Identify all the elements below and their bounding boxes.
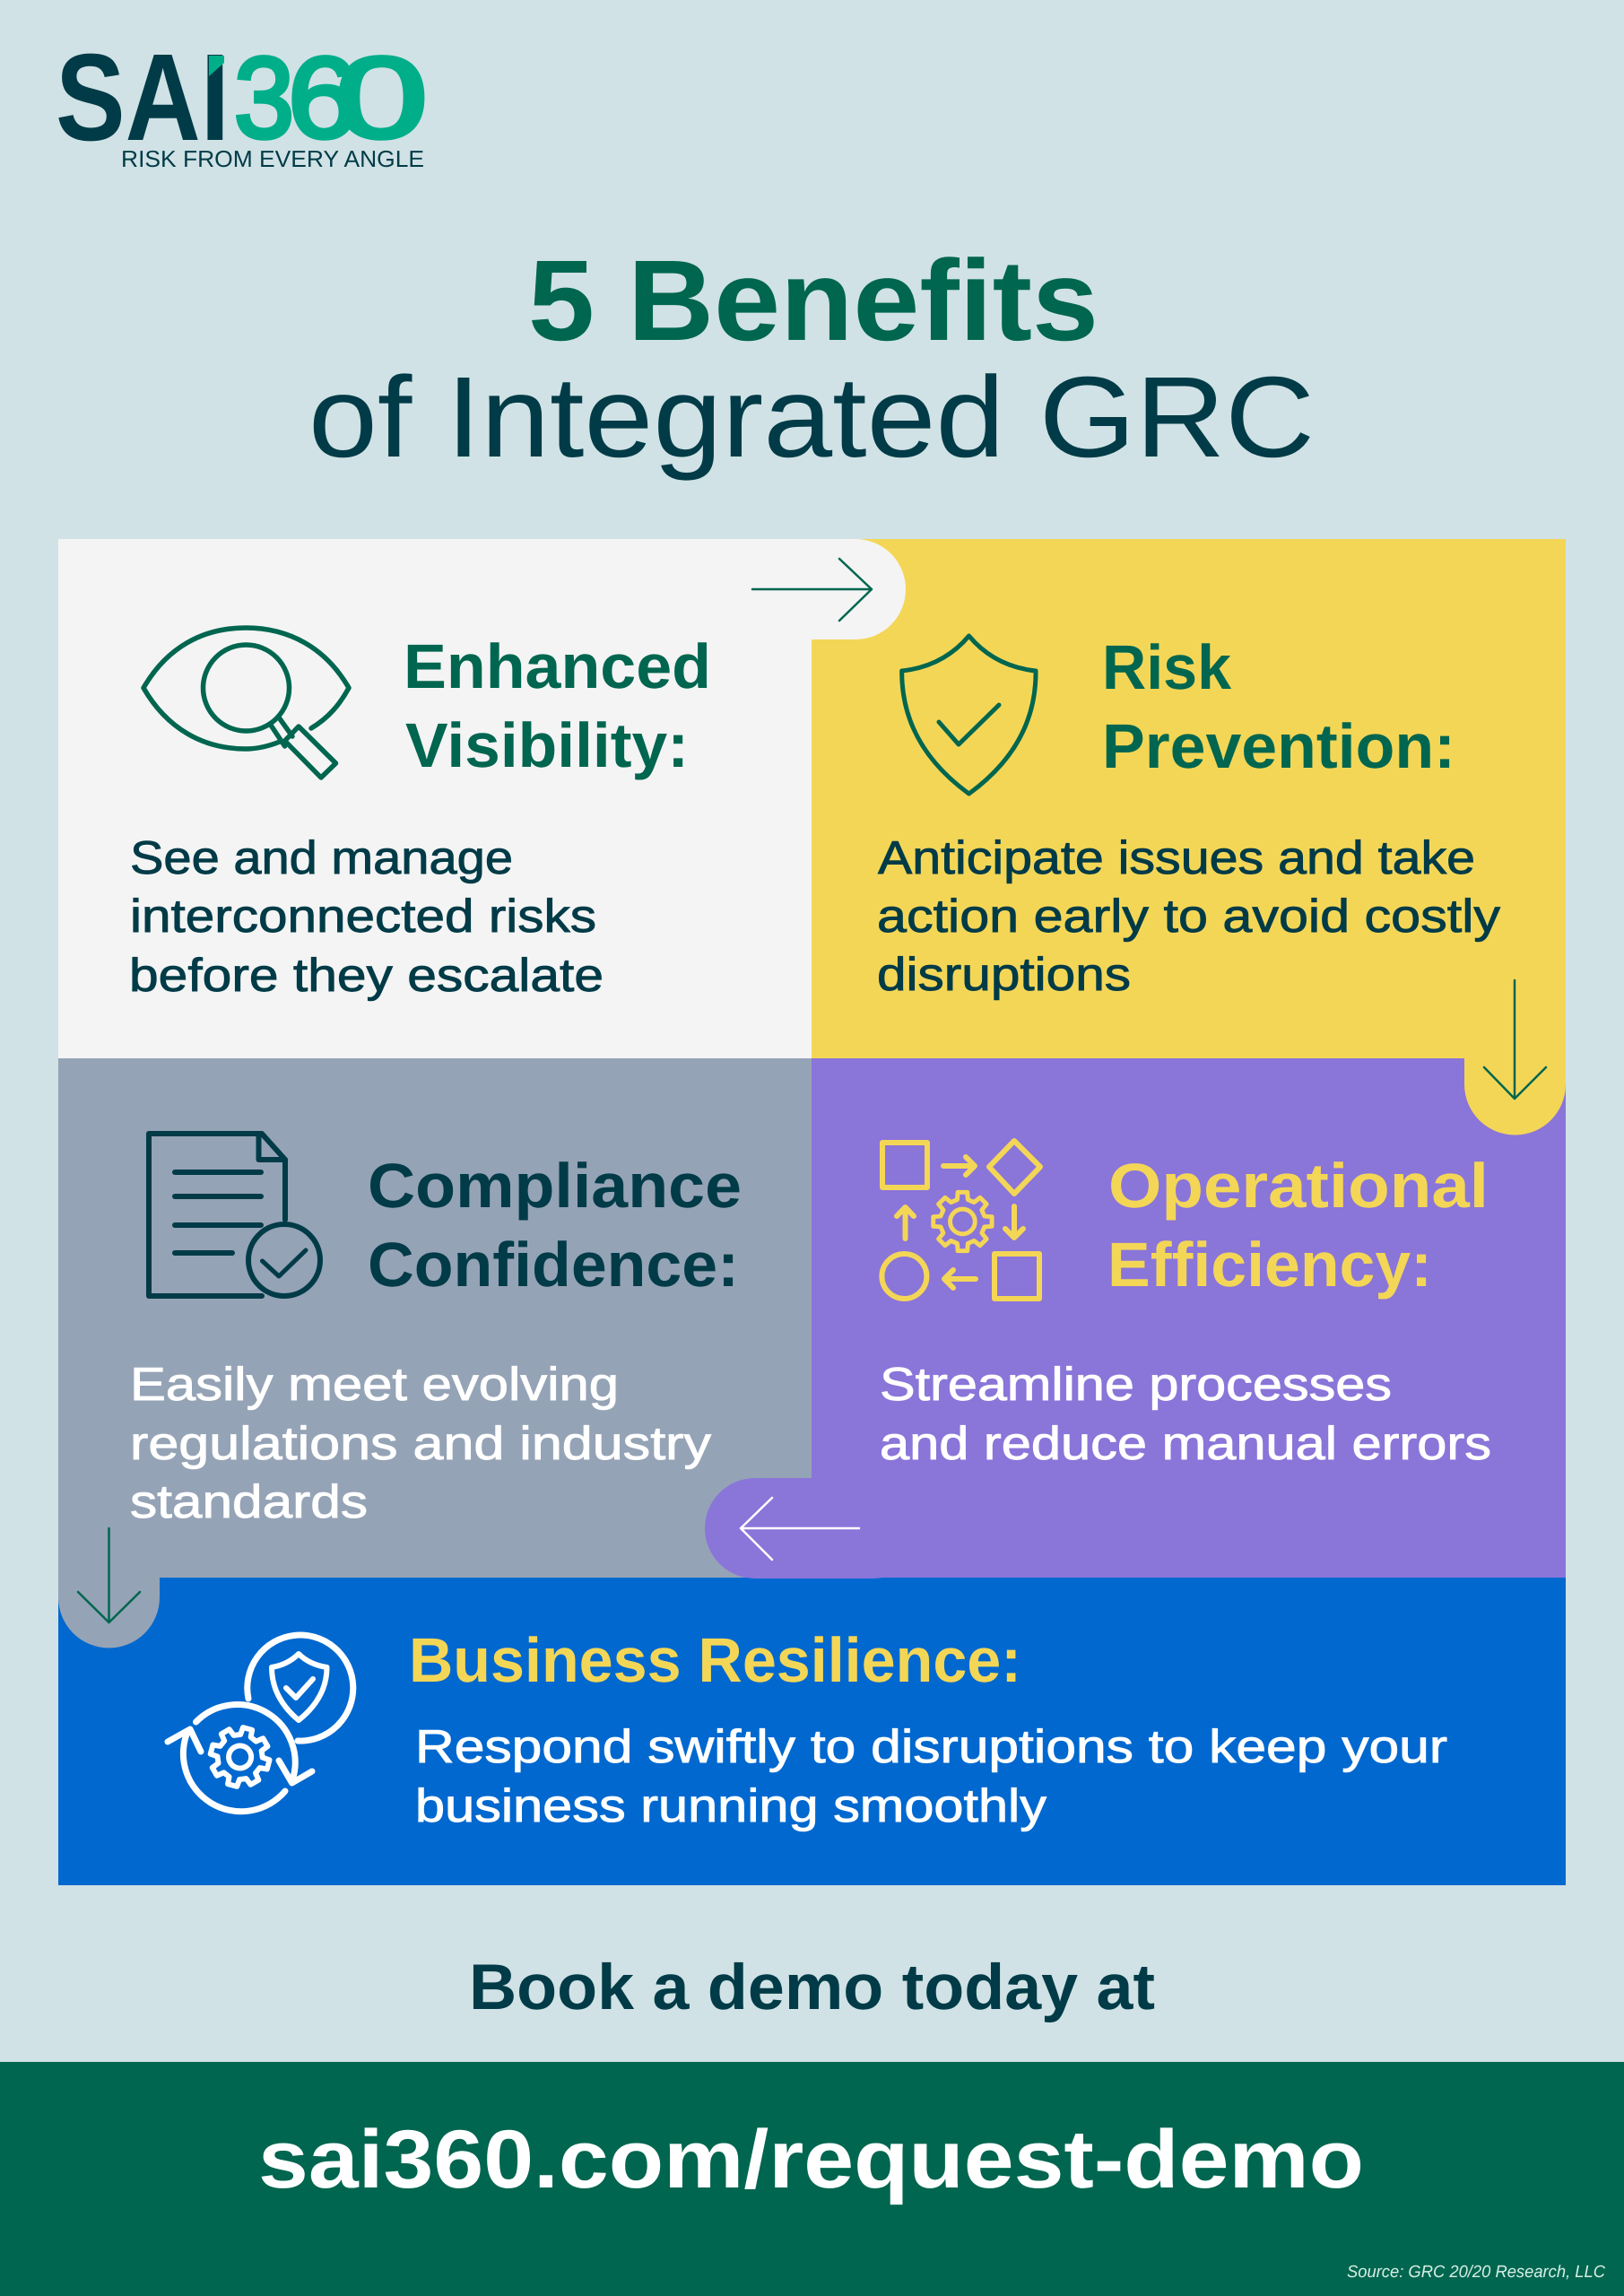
heading: Business Resilience: Business Resilience: — [409, 1625, 1021, 1695]
text: compliance description: Easily meet evolving — [130, 1359, 619, 1411]
arrow: left to compliance — [741, 1498, 859, 1560]
text: business resilience description: Respond swiftly to disruptions to keep your — [415, 1721, 1447, 1773]
heading: Operational Efficiency: Operational — [1108, 1151, 1489, 1221]
text: operational description: and reduce manual errors — [880, 1418, 1491, 1470]
text: risk prevention description: disruptions — [877, 949, 1131, 1001]
arrow: down to operational — [1484, 980, 1546, 1099]
heading: Operational Efficiency — [1107, 1151, 1489, 1300]
text: enhanced visibility description: See and manage — [130, 832, 513, 884]
logo: SAI360: RISK FROM EVERY ANGLE — [121, 145, 424, 172]
heading: Enhanced Visibility: Visibility: — [405, 710, 689, 780]
panel: enhanced visibility — [58, 539, 906, 1058]
panel: business resilience — [58, 1577, 1566, 1885]
heading: Operational Efficiency: Efficiency: — [1107, 1230, 1432, 1300]
text: enhanced visibility description — [129, 832, 604, 1002]
text: compliance description: regulations and industry — [130, 1418, 711, 1470]
title — [308, 237, 1315, 482]
text: compliance description — [130, 1359, 711, 1528]
panel: risk prevention — [812, 539, 1566, 1135]
arrow: down to business resilience — [78, 1528, 140, 1622]
text: business resilience description — [415, 1721, 1447, 1832]
icon: process flow — [881, 1141, 1040, 1299]
logo: SAI360: 0 — [335, 34, 428, 162]
panel: compliance confidence — [58, 1058, 812, 1648]
text: business resilience description: business running smoothly — [415, 1780, 1046, 1832]
text: enhanced visibility description: interconnected risks — [130, 891, 596, 943]
text: compliance description: standards — [130, 1476, 368, 1528]
text: risk prevention description: Anticipate issues and take — [878, 832, 1475, 884]
heading: Enhanced Visibility: Enhanced — [404, 631, 711, 701]
text: risk prevention description — [877, 832, 1500, 1001]
link: request demo URL: sai360.com/request-demo — [258, 2114, 1364, 2205]
logo: SAI360: 6 — [288, 34, 358, 162]
heading: Compliance Confidence: Confidence: — [368, 1230, 739, 1300]
icon: document with check — [149, 1134, 320, 1296]
logo: SAI360 — [56, 29, 428, 172]
heading: Compliance Confidence — [368, 1151, 742, 1300]
footer band — [0, 2062, 1624, 2296]
heading: Compliance Confidence: Compliance — [368, 1151, 742, 1221]
icon: eye with magnifier — [143, 628, 349, 778]
text: operational description — [880, 1359, 1491, 1470]
heading: Risk Prevention: Risk — [1102, 632, 1231, 702]
source note: Source: GRC 20/20 Research, LLC — [1347, 2263, 1605, 2282]
text: risk prevention description: action early to avoid costly — [877, 891, 1500, 943]
call to action text: Book a demo today at — [469, 1952, 1155, 2023]
text: enhanced visibility description: before they escalate — [129, 950, 604, 1002]
heading: Risk Prevention — [1102, 632, 1455, 781]
logo: SAI360: SAI — [56, 29, 230, 167]
icon: shield and gear cycle — [168, 1635, 353, 1812]
arrow: right to risk prevention — [752, 559, 872, 621]
panel: operational efficiency — [705, 1058, 1566, 1578]
title: of Integrated GRC — [308, 353, 1315, 482]
heading: Risk Prevention: Prevention: — [1102, 711, 1455, 781]
text: operational description: Streamline processes — [880, 1359, 1392, 1411]
title: 5 Benefits — [528, 237, 1099, 365]
heading: Enhanced Visibility — [404, 631, 711, 780]
logo: SAI360: 3 — [234, 34, 294, 162]
icon: shield with check — [902, 636, 1036, 794]
